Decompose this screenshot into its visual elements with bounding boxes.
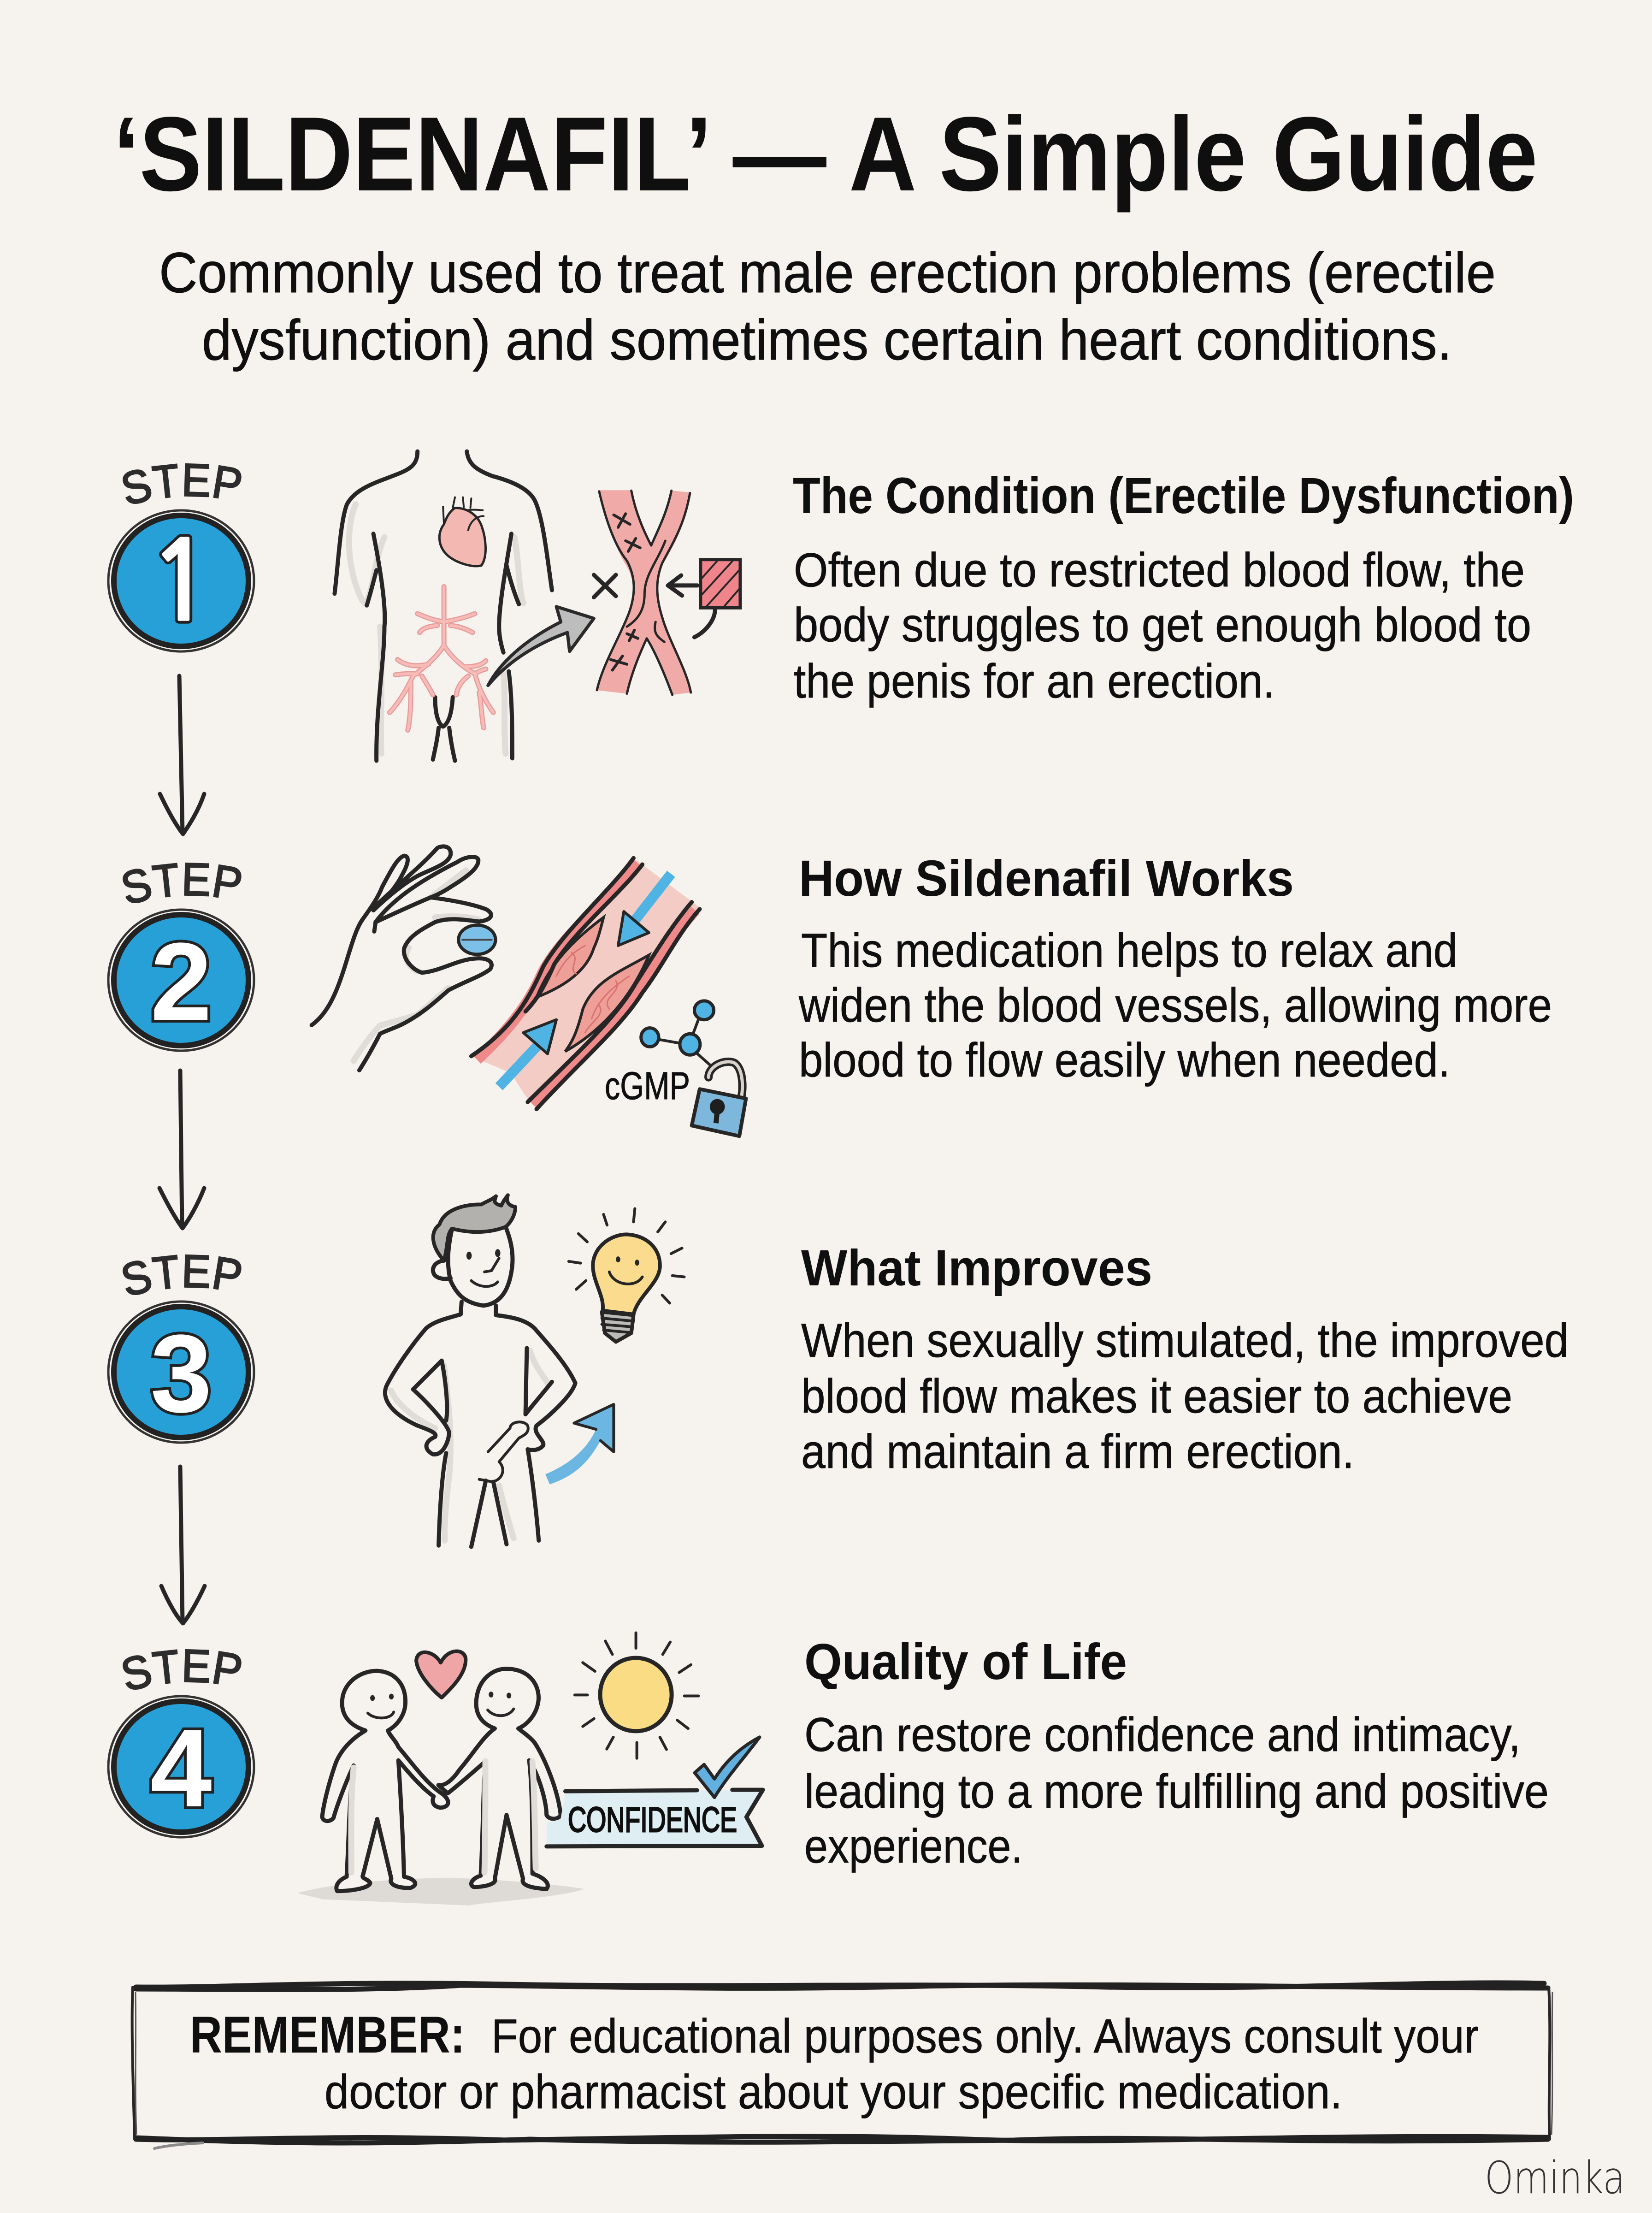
icon: cGMP molecule and unlocked padlock: cGMP [605, 1064, 690, 1107]
text: step 4 body [804, 1708, 1549, 1873]
icon: cGMP molecule and unlocked padlock [605, 1001, 746, 1136]
step 2 badge [108, 853, 254, 1051]
heading: step 2: How Sildenafil Works [799, 850, 1294, 907]
text: step 3 body [801, 1314, 1569, 1479]
step 3 badge [108, 1245, 254, 1443]
icon: arteries [389, 586, 493, 730]
icon: narrowed artery [594, 490, 691, 695]
banner: confidence: CONFIDENCE [568, 1800, 737, 1840]
heading: step 1: The Condition (Erectile Dysfunction) [793, 467, 1574, 524]
text: step 2 body: widen the blood vessels, allowing more [798, 979, 1552, 1032]
panel: step 1 [108, 451, 1574, 761]
text: step 2 body: blood to flow easily when needed. [799, 1034, 1450, 1087]
callout: remember box: REMEMBER: [190, 2006, 465, 2064]
step 4 badge: 4 [150, 1706, 212, 1830]
step 1 badge: 1 [148, 527, 215, 637]
text: step 2 body [798, 924, 1552, 1087]
arrow: body to vessel [488, 607, 594, 686]
arrow: blue downward flow [618, 874, 671, 946]
callout: remember box: For educational purposes only. Always consult your [491, 2010, 1479, 2063]
banner: confidence [547, 1737, 763, 1846]
arrow: step 1 to step 2 [160, 676, 204, 834]
icon: smiling man [385, 1195, 575, 1547]
text: step 4 body: experience. [804, 1820, 1023, 1873]
step 3 badge: 3 [150, 1312, 212, 1435]
icon: heart [439, 497, 485, 566]
callout: remember box: doctor or pharmacist about your specific medication. [324, 2065, 1342, 2119]
arrow: blue upward arrow [545, 1404, 614, 1484]
step 3 badge: STEP [116, 1245, 246, 1307]
subtitle: Commonly used to treat male erection problems (erectile [159, 242, 1496, 305]
arrow: blue upward flow [499, 1020, 556, 1087]
step 4 badge [108, 1640, 254, 1837]
heading: step 4: Quality of Life [804, 1633, 1127, 1690]
text: step 3 body: When sexually stimulated, the improved [801, 1314, 1569, 1367]
subtitle: dysfunction) and sometimes certain heart conditions. [202, 309, 1452, 372]
step 1 badge: STEP [116, 454, 246, 515]
subtitle [159, 242, 1496, 372]
text: step 3 body: and maintain a firm erection. [801, 1425, 1354, 1479]
panel: step 4 [108, 1633, 1549, 1905]
signature: Ominka [1485, 2152, 1625, 2204]
step 1 badge [108, 454, 254, 651]
text: step 4 body: leading to a more fulfilling and positive [804, 1765, 1549, 1818]
icon: body with arteries and narrowed vessel [335, 451, 740, 761]
step 4 badge: STEP [116, 1640, 246, 1701]
heading: step 3: What Improves [801, 1240, 1152, 1296]
text: step 1 body [794, 544, 1531, 708]
arrow: step 3 to step 4 [161, 1467, 205, 1623]
icon: widened blood vessel [471, 858, 701, 1109]
text: step 1 body: the penis for an erection. [794, 655, 1275, 708]
text: step 1 body: Often due to restricted blood flow, the [794, 544, 1525, 597]
text: step 3 body: blood flow makes it easier to achieve [801, 1370, 1512, 1423]
text: step 1 body: body struggles to get enough blood to [794, 598, 1531, 652]
icon: heart [416, 1651, 466, 1698]
arrow: step 2 to step 3 [159, 1071, 204, 1228]
callout: remember box [132, 1983, 1552, 2148]
icon: sun [575, 1633, 698, 1758]
icon: pill [459, 925, 496, 954]
icon: hand holding pill [312, 846, 496, 1070]
icon: plaque block with arrow [668, 560, 740, 637]
icon: couple holding hands [297, 1669, 584, 1905]
step 2 badge: STEP [116, 853, 246, 915]
text: step 2 body: This medication helps to relax and [801, 924, 1457, 977]
text: step 4 body: Can restore confidence and intimacy, [804, 1708, 1521, 1762]
icon: smiling light bulb [569, 1209, 684, 1342]
panel: step 2 [108, 846, 1552, 1136]
panel: step 3 [108, 1195, 1569, 1547]
step 2 badge: 2 [150, 920, 212, 1043]
